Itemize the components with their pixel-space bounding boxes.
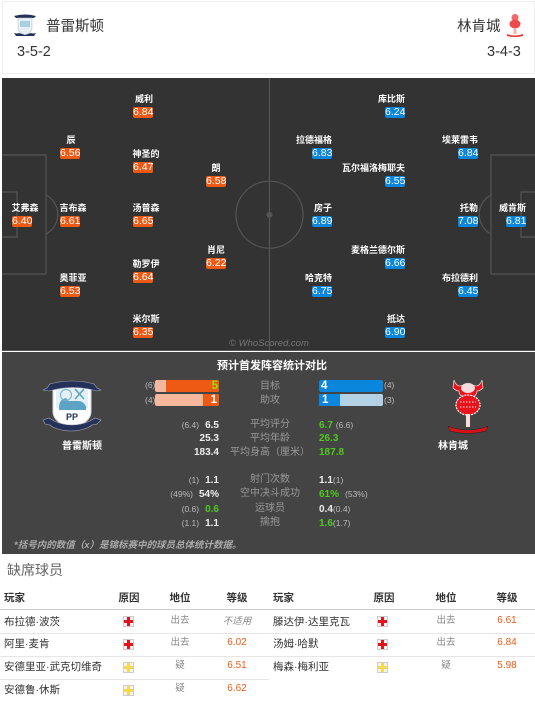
player: 艾弗森 bbox=[11, 203, 38, 227]
row: 布拉德·波茨: 出去 bbox=[170, 615, 190, 626]
player: 神圣的 bbox=[132, 149, 160, 173]
player: 威肯斯 bbox=[499, 203, 526, 227]
missing players table: away bbox=[269, 590, 535, 685]
Lincoln crest bbox=[448, 380, 488, 434]
player: 哈克特 bbox=[305, 273, 332, 297]
player: 威肯斯: 6.81 bbox=[506, 215, 526, 227]
player: 奥菲亚: 6.53 bbox=[60, 285, 80, 297]
player: 托勒 bbox=[458, 203, 478, 227]
player: 埃莱雷韦: 埃莱雷韦 bbox=[442, 135, 478, 145]
row: 安德鲁·休斯 bbox=[4, 682, 247, 696]
rating row bbox=[182, 418, 353, 431]
row: 滕达伊·达里克瓦: 滕达伊·达里克瓦 bbox=[273, 616, 350, 628]
player: 神圣的: 6.47 bbox=[133, 161, 153, 173]
player: 麦格兰德尔斯: 6.66 bbox=[385, 257, 405, 269]
player: 麦格兰德尔斯: 麦格兰德尔斯 bbox=[351, 245, 405, 255]
column headers: 等级 bbox=[226, 592, 248, 604]
player: 房子: 房子 bbox=[314, 203, 332, 213]
player: 哈克特: 6.75 bbox=[312, 285, 332, 297]
player: 库比斯 bbox=[378, 94, 406, 118]
row: 安德里亚·武克切维奇: 6.51 bbox=[227, 660, 247, 671]
player: 吉布森 bbox=[59, 203, 86, 227]
player: 拉德福格: 6.83 bbox=[312, 147, 332, 159]
row: 安德鲁·休斯: 安德鲁·休斯 bbox=[4, 684, 60, 696]
goals label: 目标 bbox=[260, 381, 280, 392]
icon: Preston crest small bbox=[14, 14, 36, 36]
player: 肖尼 bbox=[206, 245, 226, 269]
row: 安德里亚·武克切维奇 bbox=[4, 660, 247, 673]
player: 威利: 6.84 bbox=[133, 106, 153, 118]
player: 勒罗伊: 6.64 bbox=[133, 271, 153, 283]
player: 拉德福格: 拉德福格 bbox=[296, 135, 332, 145]
row: 梅森·梅利亚 bbox=[269, 660, 535, 676]
player: 布拉德利: 布拉德利 bbox=[442, 273, 478, 283]
player: 哈克特: 哈克特 bbox=[305, 273, 332, 283]
goals bar home: 5 bbox=[212, 380, 218, 392]
watermark: © WhoScored.com bbox=[229, 338, 309, 349]
row: 阿里·麦肯: 6.02 bbox=[227, 637, 247, 648]
stats panel bbox=[2, 352, 535, 554]
row: 安德鲁·休斯: 疑 bbox=[175, 683, 185, 694]
row: 梅森·梅利亚: 疑 bbox=[441, 660, 451, 671]
row: 汤姆·哈默 bbox=[269, 637, 535, 653]
row: 安德里亚·武克切维奇: 疑 bbox=[175, 660, 185, 671]
goals away baseline: (4) bbox=[384, 380, 394, 390]
away column headers: 地位 bbox=[436, 592, 456, 604]
tackles row: 1.6(1.7) bbox=[319, 518, 350, 529]
player: 勒罗伊 bbox=[132, 259, 160, 283]
player: 朗 bbox=[206, 163, 226, 187]
away team name: 林肯城 bbox=[457, 19, 500, 35]
shots row: (1) 1.1 bbox=[189, 475, 219, 486]
row: 汤姆·哈默: 6.84 bbox=[497, 637, 517, 648]
player: 托勒: 托勒 bbox=[460, 203, 478, 213]
row: 滕达伊·达里克瓦: 出去 bbox=[436, 615, 456, 626]
row: 阿里·麦肯 bbox=[4, 636, 247, 650]
dribbles row: (0.6) 0.6 bbox=[182, 504, 219, 515]
tackles row: 擒抱 bbox=[260, 517, 280, 528]
pitch markings bbox=[2, 78, 535, 350]
player: 米尔斯: 米尔斯 bbox=[132, 314, 160, 324]
icon: Lincoln crest small bbox=[507, 14, 523, 37]
away column headers: 玩家 bbox=[273, 592, 294, 604]
player: 辰: 辰 bbox=[66, 135, 76, 145]
player: 布拉德利 bbox=[442, 272, 478, 297]
stats title: 预计首发阵容统计对比 bbox=[217, 360, 327, 372]
player: 麦格兰德尔斯 bbox=[351, 245, 405, 269]
player: 艾弗森: 艾弗森 bbox=[11, 203, 38, 213]
player: 吉布森: 吉布森 bbox=[59, 203, 86, 213]
player: 拉德福格 bbox=[296, 134, 332, 159]
Lincoln label: 林肯城 bbox=[438, 441, 468, 452]
aerial row: (49%) 54% bbox=[170, 489, 219, 500]
player: 朗: 6.58 bbox=[206, 175, 226, 187]
assists label: 助攻 bbox=[260, 395, 280, 406]
dribbles row bbox=[182, 502, 350, 515]
Preston crest bbox=[42, 380, 102, 432]
assists away baseline: (3) bbox=[384, 395, 394, 405]
column headers: 玩家 bbox=[4, 592, 25, 604]
player: 奥菲亚 bbox=[59, 273, 86, 297]
player: 辰: 6.56 bbox=[60, 147, 80, 159]
player: 汤普森: 汤普森 bbox=[132, 203, 160, 213]
player: 朗: 朗 bbox=[211, 163, 220, 173]
player: 辰 bbox=[60, 135, 80, 159]
player: 威利 bbox=[133, 94, 154, 118]
aerial row: 空中决斗成功 bbox=[240, 488, 300, 499]
rating row: 6.7 (6.6) bbox=[319, 420, 353, 431]
age row: 26.3 bbox=[319, 433, 338, 444]
player: 抵达: 抵达 bbox=[387, 314, 405, 324]
age row: 25.3 bbox=[200, 433, 219, 444]
stats footnote: *括号内的数值（x）是锦标赛中的球员总体统计数据。 bbox=[14, 540, 241, 551]
player: 瓦尔福洛梅耶夫 bbox=[342, 163, 405, 187]
goals bar away bbox=[319, 380, 383, 392]
player: 威肯斯: 威肯斯 bbox=[499, 203, 526, 213]
player: 肖尼: 肖尼 bbox=[207, 245, 225, 255]
rating row: 平均评分 bbox=[250, 419, 290, 430]
player: 威利: 威利 bbox=[135, 94, 153, 104]
pitch panel bbox=[2, 78, 535, 351]
row: 滕达伊·达里克瓦: 6.61 bbox=[497, 615, 517, 626]
player: 奥菲亚: 奥菲亚 bbox=[59, 273, 86, 283]
away column headers: 等级 bbox=[496, 592, 518, 604]
Preston crest: PP bbox=[66, 412, 78, 422]
player: 瓦尔福洛梅耶夫: 6.55 bbox=[385, 175, 405, 187]
dribbles row: 运球员 bbox=[255, 503, 285, 514]
player: 勒罗伊: 勒罗伊 bbox=[132, 259, 160, 269]
row: 梅森·梅利亚: 梅森·梅利亚 bbox=[273, 661, 329, 673]
goals home baseline: (6) bbox=[145, 380, 155, 390]
row: 布拉德·波茨 bbox=[4, 614, 252, 628]
column headers bbox=[4, 592, 248, 604]
missing players heading: 缺席球员 bbox=[7, 562, 63, 578]
home formation: 3-5-2 bbox=[17, 44, 51, 60]
row: 滕达伊·达里克瓦 bbox=[269, 615, 535, 631]
dribbles row: 0.4(0.4) bbox=[319, 504, 350, 515]
row: 安德里亚·武克切维奇: 安德里亚·武克切维奇 bbox=[4, 661, 102, 673]
player: 神圣的: 神圣的 bbox=[132, 149, 160, 159]
column headers: 地位 bbox=[170, 592, 190, 604]
rating row: (6.4) 6.5 bbox=[182, 420, 219, 431]
player: 汤普森: 6.65 bbox=[133, 215, 153, 227]
away column headers: 原因 bbox=[374, 592, 394, 604]
tackles row bbox=[182, 516, 350, 529]
assists bar home: 1 bbox=[211, 394, 217, 406]
player: 托勒: 7.08 bbox=[458, 215, 478, 227]
missing players table: home bbox=[0, 592, 269, 680]
shots row: 射门次数 bbox=[250, 474, 290, 485]
player: 瓦尔福洛梅耶夫: 瓦尔福洛梅耶夫 bbox=[342, 163, 405, 173]
player: 米尔斯 bbox=[132, 314, 160, 338]
match header panel bbox=[2, 1, 535, 74]
player: 埃莱雷韦: 6.84 bbox=[458, 147, 478, 159]
row: 布拉德·波茨: 布拉德·波茨 bbox=[4, 616, 60, 628]
shots row bbox=[189, 473, 343, 486]
aerial row bbox=[170, 487, 368, 500]
player: 肖尼: 6.22 bbox=[206, 257, 226, 269]
height row bbox=[194, 446, 344, 458]
shots row: 1.1(1) bbox=[319, 475, 343, 486]
player: 布拉德利: 6.45 bbox=[458, 285, 478, 297]
height row: 187.8 bbox=[319, 447, 344, 458]
player: 抵达 bbox=[385, 314, 406, 338]
row: 安德鲁·休斯: 6.62 bbox=[227, 683, 247, 694]
goals bar home bbox=[155, 380, 219, 392]
aerial row: 61% (53%) bbox=[319, 489, 368, 500]
row: 汤姆·哈默: 出去 bbox=[436, 637, 456, 648]
player: 房子 bbox=[312, 203, 332, 227]
row: 汤姆·哈默: 汤姆·哈默 bbox=[273, 638, 318, 650]
away formation: 3-4-3 bbox=[487, 44, 521, 60]
row: 布拉德·波茨: 不适用 bbox=[223, 616, 251, 627]
player: 库比斯: 库比斯 bbox=[378, 94, 405, 104]
row: 阿里·麦肯: 阿里·麦肯 bbox=[4, 638, 50, 650]
assists bar away bbox=[319, 394, 383, 406]
row: 阿里·麦肯: 出去 bbox=[170, 637, 190, 648]
age row: 平均年龄 bbox=[250, 433, 290, 444]
player: 吉布森: 6.61 bbox=[60, 215, 80, 227]
assists home baseline: (4) bbox=[145, 395, 155, 405]
player: 埃莱雷韦 bbox=[442, 135, 478, 159]
assists bar home bbox=[155, 394, 219, 406]
player: 房子: 6.89 bbox=[312, 215, 332, 227]
height row: 183.4 bbox=[194, 447, 219, 458]
player: 汤普森 bbox=[132, 203, 160, 227]
age row bbox=[200, 432, 338, 444]
player: 米尔斯: 6.35 bbox=[133, 326, 153, 338]
assists bar away: 1 bbox=[322, 394, 328, 406]
away column headers bbox=[269, 590, 535, 606]
goals bar away: 4 bbox=[321, 380, 327, 392]
height row: 平均身高（厘米） bbox=[230, 447, 310, 458]
player: 库比斯: 6.24 bbox=[385, 106, 405, 118]
player: 抵达: 6.90 bbox=[385, 326, 405, 338]
Preston label: 普雷斯顿 bbox=[62, 441, 102, 452]
tackles row: (1.1) 1.1 bbox=[182, 518, 219, 529]
column headers: 原因 bbox=[118, 592, 140, 604]
home team name: 普雷斯顿 bbox=[46, 19, 104, 35]
player: 艾弗森: 6.40 bbox=[12, 215, 32, 227]
row: 梅森·梅利亚: 5.98 bbox=[497, 660, 517, 671]
